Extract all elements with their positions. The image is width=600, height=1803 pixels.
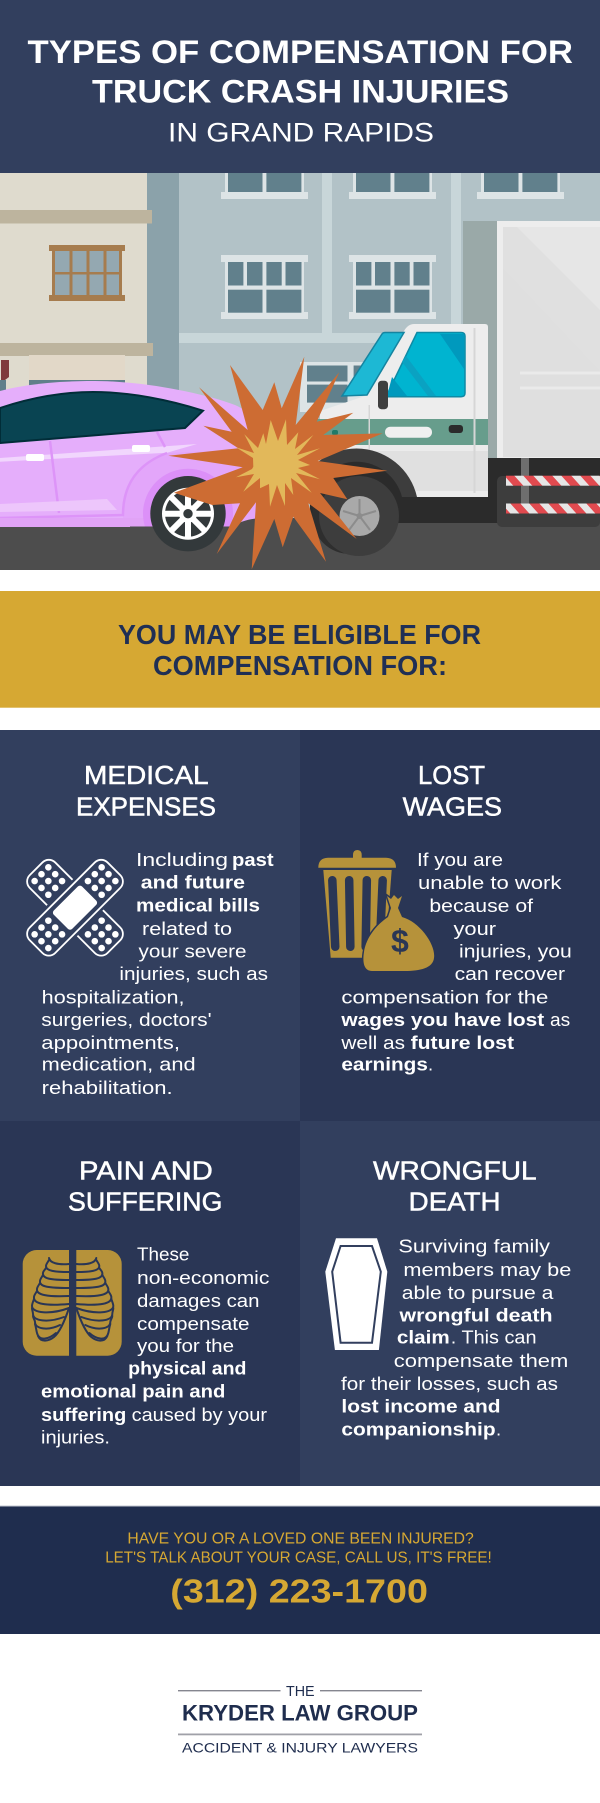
text: medical expenses: Including (136, 849, 228, 870)
icon: trash can with money bag: $ (391, 923, 409, 959)
title: TRUCK CRASH INJURIES (92, 74, 509, 110)
text: lost wages: If you are (417, 849, 503, 870)
text: pain and suffering: physical and (128, 1358, 246, 1379)
eligibility banner: YOU MAY BE ELIGIBLE FOR (118, 619, 481, 650)
phone number: (312) 223-1700 (170, 1573, 428, 1610)
logo (178, 1684, 422, 1756)
text: pain and suffering: injuries. (41, 1427, 110, 1448)
call to action text: LET'S TALK ABOUT YOUR CASE, CALL US, IT'S FREE! (105, 1549, 492, 1566)
logo: ACCIDENT & INJURY LAWYERS (182, 1740, 418, 1756)
text: medical expenses: surgeries, doctors' (41, 1009, 212, 1030)
text: lost wages: well as (340, 1032, 405, 1053)
text: medical expenses: related to (142, 918, 232, 939)
text: wrongful death: compensate them (394, 1350, 568, 1371)
text: medical expenses: injuries, such as (119, 963, 268, 984)
heading: pain and suffering: PAIN AND (79, 1155, 213, 1185)
text: medical expenses: medical bills (136, 895, 260, 916)
text: medical expenses: and future (141, 872, 245, 893)
car (0, 381, 262, 570)
heading: lost wages (403, 760, 502, 822)
text: pain and suffering (41, 1244, 269, 1448)
text: lost wages: . (428, 1054, 433, 1075)
text: medical expenses (41, 849, 274, 1098)
car wheel (150, 476, 226, 551)
text: lost wages: injuries, you (459, 940, 572, 961)
icon: rib cage (23, 1248, 122, 1358)
text: wrongful death: for their losses, such as (341, 1373, 558, 1394)
text: pain and suffering: non-economic (137, 1267, 269, 1288)
text: wrongful death: members may be (403, 1259, 571, 1280)
text: pain and suffering: compensate (137, 1313, 250, 1334)
heading: lost wages: WAGES (403, 792, 502, 822)
icon: trash can with money bag (318, 850, 434, 971)
heading: medical expenses: EXPENSES (76, 792, 216, 822)
text: lost wages: as (550, 1009, 570, 1030)
text: lost wages: wages you have lost (340, 1009, 544, 1030)
text: lost wages: earnings (341, 1054, 428, 1075)
panel: lost wages (300, 730, 600, 1121)
truck (296, 221, 600, 556)
text: medical expenses: hospitalization, (42, 986, 185, 1007)
text: medical expenses: rehabilitation. (42, 1077, 173, 1098)
explosion burst (168, 357, 387, 569)
text: lost wages: unable to work (418, 872, 562, 893)
heading: medical expenses (76, 760, 216, 822)
text: medical expenses: your severe (138, 940, 246, 961)
panel: wrongful death (300, 1121, 600, 1486)
header panel (0, 0, 600, 173)
text: pain and suffering: you for the (137, 1335, 234, 1356)
subtitle: IN GRAND RAPIDS (168, 118, 434, 148)
text: wrongful death: lost income and (341, 1396, 501, 1417)
panel: medical expenses (0, 730, 300, 1121)
text: pain and suffering: These (137, 1244, 189, 1265)
text: wrongful death (341, 1236, 571, 1440)
text: pain and suffering: emotional pain and (41, 1381, 225, 1402)
title: TYPES OF COMPENSATION FOR (28, 34, 573, 70)
road (0, 518, 600, 570)
text: wrongful death: able to pursue a (402, 1282, 554, 1303)
heading: medical expenses: MEDICAL (84, 760, 209, 790)
text: wrongful death: . This can (451, 1326, 536, 1347)
logo: KRYDER LAW GROUP (182, 1701, 418, 1726)
truck wheel (312, 476, 399, 556)
text: medical expenses: medication, and (42, 1054, 196, 1075)
text: medical expenses: appointments, (41, 1032, 180, 1053)
heading: wrongful death (373, 1155, 537, 1217)
text: wrongful death: . (496, 1419, 501, 1440)
text: lost wages: future lost (411, 1032, 514, 1053)
text: wrongful death: wrongful death (398, 1305, 553, 1326)
text: lost wages: because of (429, 895, 534, 916)
text: wrongful death: companionship (341, 1419, 496, 1440)
text: lost wages (340, 849, 572, 1075)
panel: pain and suffering (0, 1121, 300, 1486)
title (28, 34, 573, 110)
heading: wrongful death: WRONGFUL (373, 1155, 537, 1185)
heading: wrongful death: DEATH (409, 1187, 501, 1217)
text: pain and suffering: damages can (137, 1290, 260, 1311)
logo: THE (286, 1684, 315, 1700)
heading: pain and suffering (68, 1155, 222, 1217)
call to action (0, 1506, 600, 1634)
cream building (0, 173, 153, 413)
eligibility banner (0, 591, 600, 708)
eligibility banner: COMPENSATION FOR: (153, 650, 447, 681)
text: lost wages: can recover (455, 963, 565, 984)
background buildings (0, 173, 600, 533)
crash illustration (0, 173, 600, 570)
text: pain and suffering: suffering (41, 1404, 126, 1425)
icon: coffin (325, 1238, 387, 1350)
text: wrongful death: Surviving family (398, 1236, 551, 1257)
call to action text (105, 1530, 492, 1566)
text: lost wages: compensation for the (341, 986, 548, 1007)
heading: pain and suffering: SUFFERING (68, 1187, 222, 1217)
text: medical expenses: past (232, 849, 274, 870)
text: pain and suffering: caused by your (132, 1404, 267, 1425)
call to action text: HAVE YOU OR A LOVED ONE BEEN INJURED? (127, 1530, 474, 1547)
heading: lost wages: LOST (418, 760, 485, 790)
text: wrongful death: claim (397, 1326, 450, 1347)
text: lost wages: your (454, 918, 496, 939)
icon: crossed bandages (23, 856, 127, 959)
